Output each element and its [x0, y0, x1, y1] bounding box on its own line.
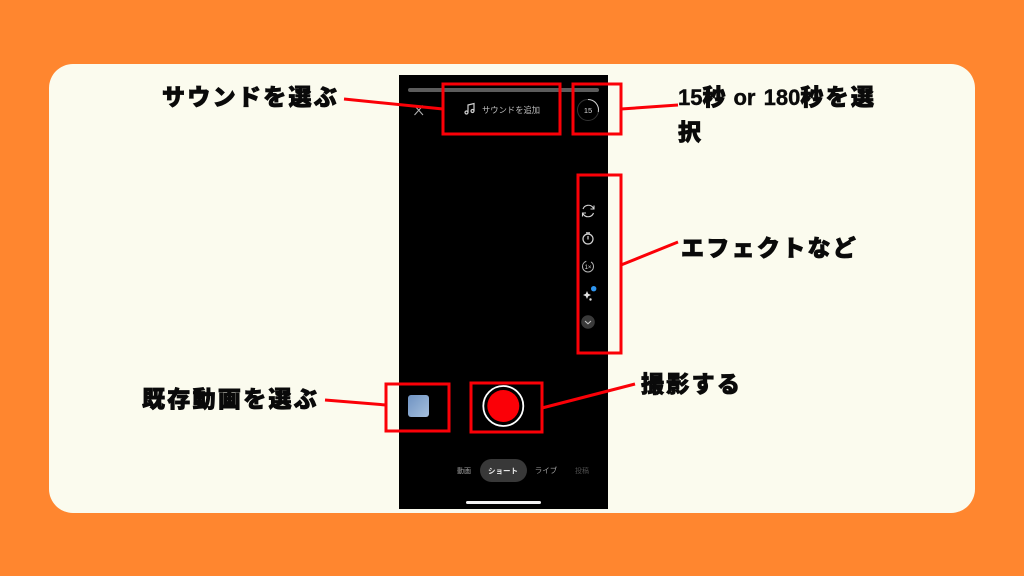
- label: choose sound: サウンドを選ぶ: [162, 84, 339, 110]
- label: record: 撮影する: [641, 371, 742, 397]
- add sound label: サウンドを追加: [482, 105, 540, 115]
- icon: 15 second timer: 15: [584, 106, 592, 115]
- icon: effects sparkle: [583, 286, 596, 301]
- icon: speed: 1×: [585, 265, 592, 271]
- label: choose duration: 15秒 or 180秒を選択: [678, 84, 876, 145]
- record button: [483, 386, 523, 426]
- icon: stopwatch: [583, 233, 593, 244]
- progress bar: [408, 88, 599, 92]
- home indicator: [466, 501, 541, 504]
- icon: expand chevron: [581, 315, 595, 329]
- callout boxes and connector lines: [325, 84, 678, 432]
- phone screen: [399, 75, 608, 509]
- icon: close: [414, 106, 423, 115]
- mode tabs: ショート: [488, 466, 518, 476]
- icon: flip camera: [582, 205, 594, 217]
- label: choose existing video: 既存動画を選ぶ: [142, 386, 319, 412]
- icon: 15 second timer: [578, 100, 598, 120]
- mode tabs: ライブ: [535, 465, 558, 475]
- label: effects: エフェクトなど: [681, 235, 858, 261]
- icon: music note: [465, 104, 474, 114]
- mode tabs: [457, 459, 589, 482]
- panel: cream background card: [49, 64, 975, 513]
- icon: speed: [582, 261, 594, 272]
- mode tabs: 動画: [457, 466, 471, 475]
- mode tabs: 投稿: [575, 466, 589, 475]
